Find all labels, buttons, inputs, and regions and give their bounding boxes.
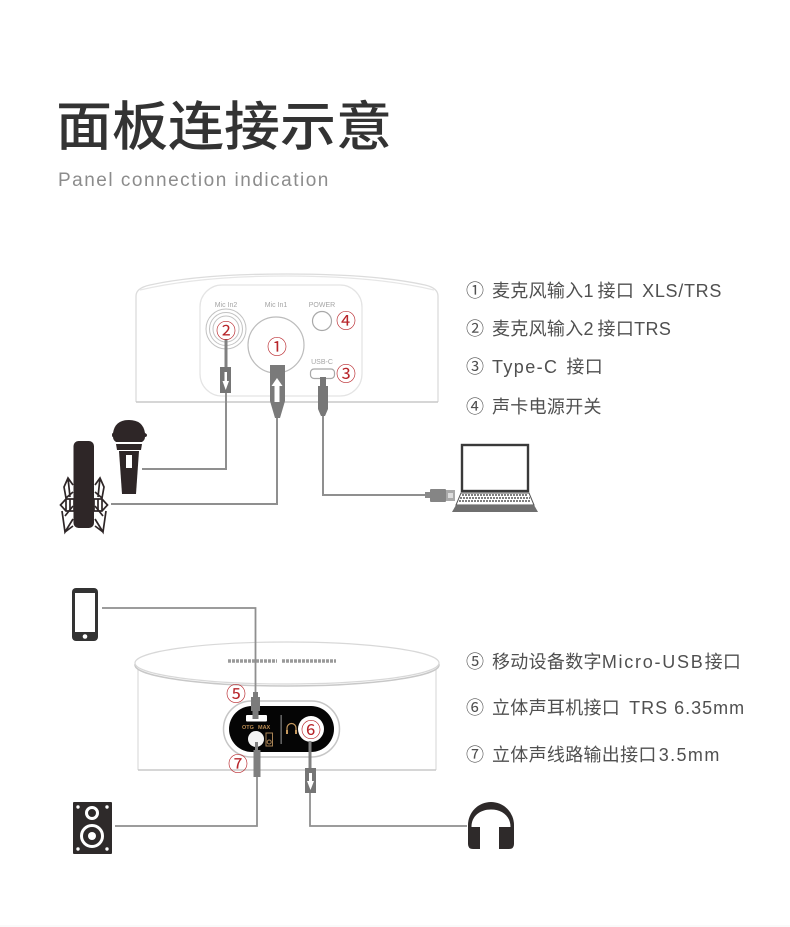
- legend: item 2: 麦克风输入2接口TRS: [492, 315, 671, 341]
- icon: smartphone: [72, 588, 98, 641]
- cable: mic to Mic In 2: [142, 393, 226, 469]
- number 5: ⑤: [226, 678, 246, 707]
- front panel: OTG: [242, 725, 254, 731]
- Mic In 1 jack: [248, 317, 304, 373]
- legend: item 4: 声卡电源开关: [492, 393, 602, 419]
- legend: item 6: 立体声耳机接口 TRS 6.35mm: [492, 694, 745, 720]
- legend: item 4: ④: [466, 393, 484, 419]
- TRS plug 2: [220, 339, 231, 393]
- icon: headphones: [468, 802, 514, 849]
- legend: item 6: ⑥: [466, 694, 484, 720]
- Mic In 2 jack: [206, 309, 246, 349]
- legend: item 3: Type-C 接口: [492, 353, 603, 379]
- legend: item 5: ⑤: [466, 648, 484, 674]
- legend: item 2: ②: [466, 315, 484, 341]
- cable: USB to laptop: [323, 414, 428, 495]
- USB-C port: [310, 369, 334, 378]
- legend: item 3: ③: [466, 353, 484, 379]
- XLR plug: [270, 365, 285, 418]
- TRS plug 6: [305, 741, 316, 793]
- device logo: [228, 659, 336, 663]
- number 7: ⑦: [228, 748, 248, 777]
- 3.5mm plug: [254, 742, 260, 777]
- front panel: [224, 701, 340, 757]
- legend: item 7: 立体声线路输出接口3.5mm: [492, 741, 721, 767]
- USB-A plug: [425, 489, 455, 502]
- top device body: [136, 274, 438, 402]
- icon: handheld microphone: [112, 420, 147, 494]
- top panel labels: USB-C: [311, 359, 333, 366]
- top panel labels: Mic In1: [265, 302, 287, 309]
- USB-C plug: [318, 377, 328, 416]
- icon: condenser microphone: [60, 441, 108, 532]
- icon: speaker: [73, 802, 112, 854]
- number 4: ④: [336, 305, 356, 334]
- cable: speaker to line out: [115, 776, 257, 826]
- legend: item 5: 移动设备数字Micro-USB接口: [492, 648, 741, 674]
- Micro-USB plug: [251, 692, 260, 719]
- legend: item 7: ⑦: [466, 741, 484, 767]
- top panel labels: Mic In2: [215, 302, 237, 309]
- number 2: ②: [216, 315, 236, 344]
- legend: item 1: 麦克风输入1接口 XLS/TRS: [492, 277, 722, 303]
- legend: item 1: ①: [466, 277, 484, 303]
- cable: phone to Micro-USB: [102, 608, 256, 692]
- bottom device body: [135, 642, 439, 770]
- number 3: ③: [336, 358, 356, 387]
- number 6: ⑥: [301, 714, 321, 743]
- title: 面板连接示意: [56, 85, 392, 161]
- front panel: MAX: [258, 725, 271, 731]
- icon: laptop: [452, 445, 538, 512]
- cable: headphones to TRS: [310, 792, 467, 826]
- power button: [312, 312, 332, 330]
- top panel labels: [215, 302, 335, 366]
- top panel labels: POWER: [309, 302, 335, 309]
- cable: condenser mic to Mic In 1: [111, 416, 277, 504]
- number 1: ①: [267, 331, 287, 360]
- subtitle: Panel connection indication: [58, 170, 330, 191]
